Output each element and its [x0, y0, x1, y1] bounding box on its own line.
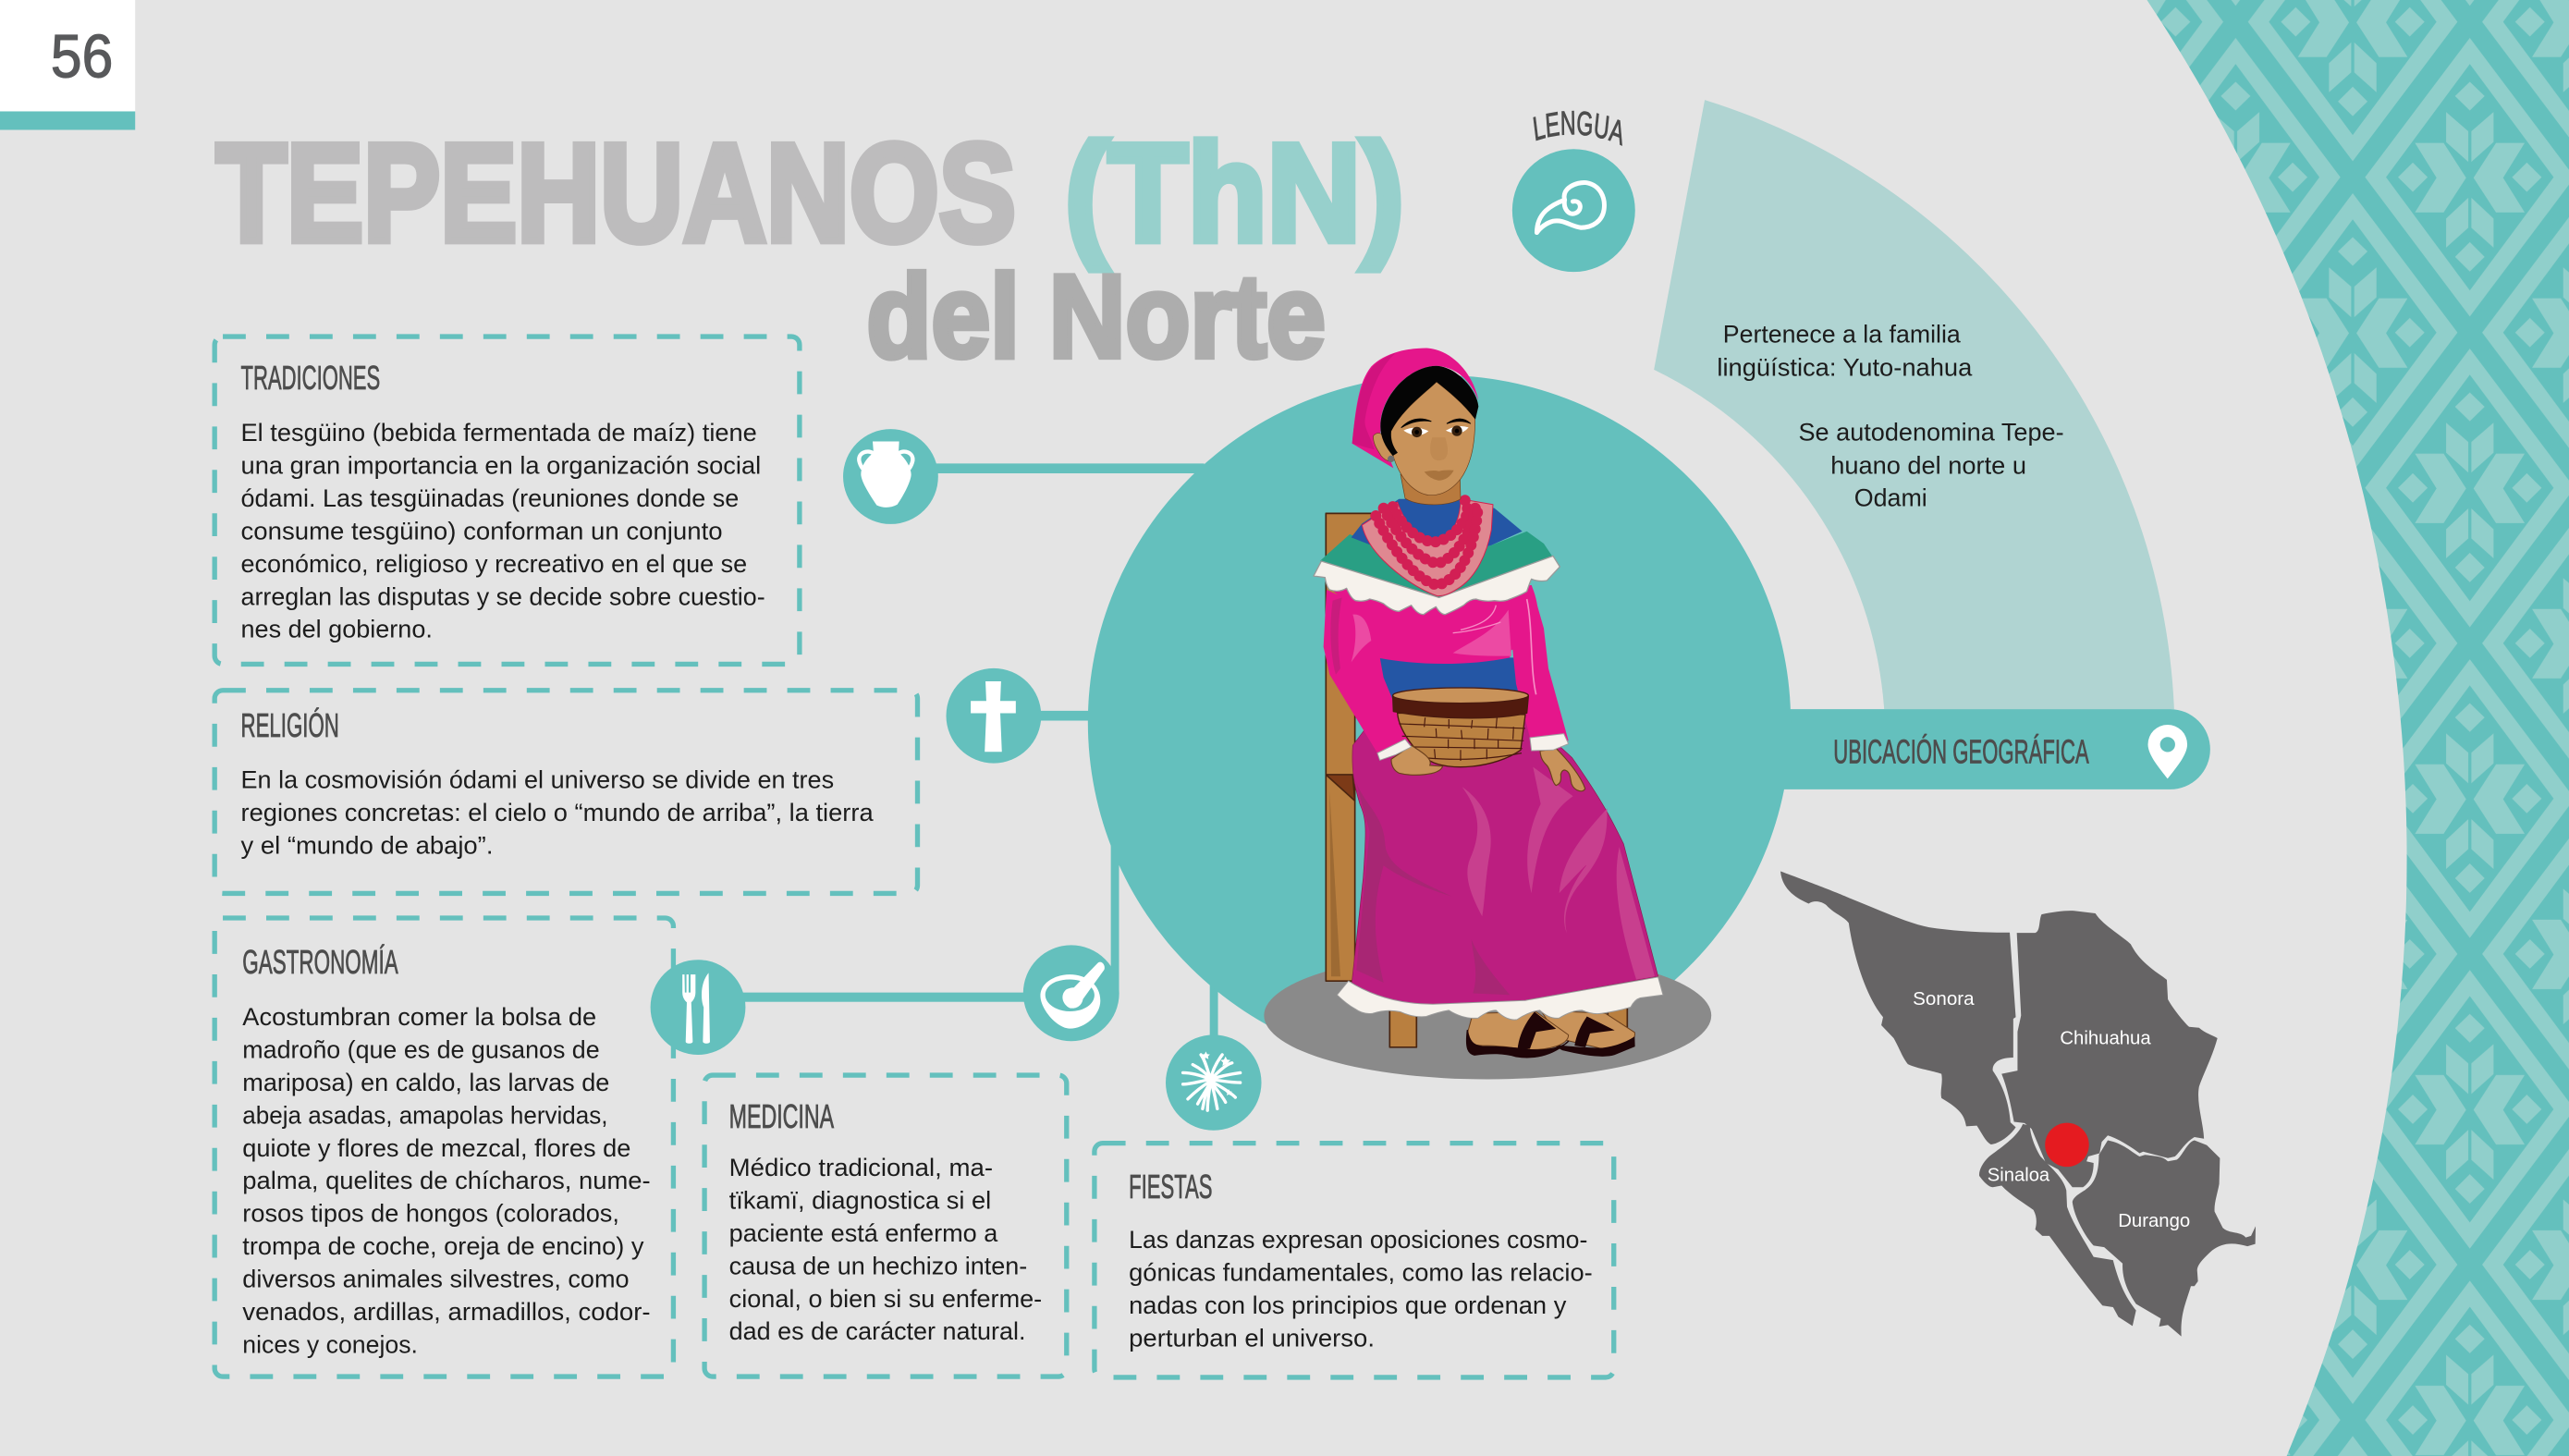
title: TEPEHUANOS — [216, 115, 1016, 270]
panel: gastronomia: mariposa) en caldo, las larvas de — [242, 1069, 609, 1096]
neck — [1401, 474, 1461, 505]
panel: gastronomia: diversos animales silvestres, como — [242, 1266, 630, 1293]
hands — [1391, 745, 1585, 791]
eyes and brows — [1401, 419, 1471, 437]
panel: tradiciones: consume tesgüino) conforman un conjunto — [241, 517, 723, 544]
page number tab — [0, 0, 135, 129]
map labels: Sinaloa — [1988, 1165, 2050, 1185]
bib — [1362, 499, 1493, 596]
blue belt — [1376, 657, 1519, 703]
title: del Norte — [867, 251, 1326, 383]
connector lines — [738, 463, 1218, 1040]
hair — [1380, 366, 1478, 456]
panel: medicina: Médico tradicional, ma- — [729, 1154, 993, 1181]
panel: gastronomia: rosos tipos de hongos (colorados, — [242, 1200, 619, 1228]
shawl — [1320, 532, 1553, 599]
map labels — [1913, 989, 2190, 1231]
panel: medicina: MEDICINA — [729, 1097, 835, 1135]
panel: fiestas: Las danzas expresan oposiciones cosmo- — [1129, 1226, 1587, 1254]
panel: medicina: cional, o bien si su enferme- — [729, 1285, 1042, 1313]
panel: tradiciones: nes del gobierno. — [241, 616, 433, 643]
chair — [1326, 513, 1627, 1047]
basket — [1393, 688, 1528, 767]
language heading curved: LENGUA — [1533, 111, 1622, 146]
panel: gastronomia: abeja asadas, amapolas hervidas, — [242, 1101, 608, 1129]
panel: gastronomia: GASTRONOMÍA — [242, 943, 398, 981]
panel: gastronomia: nices y conejos. — [242, 1330, 418, 1358]
icon: mortar and pestle — [1023, 945, 1119, 1041]
panel: fiestas: gónicas fundamentales, como las relacio- — [1129, 1258, 1593, 1286]
central teal circle — [1088, 375, 1791, 1070]
location bar: UBICACIÓN GEOGRÁFICA — [1833, 733, 2089, 771]
title — [216, 115, 1404, 383]
cuffs — [1377, 734, 1569, 760]
icon: cross — [947, 668, 1041, 764]
icon: fork and knife — [651, 960, 745, 1055]
map labels: Sonora — [1913, 989, 1975, 1009]
text: language: Se autodenomina Tepe- — [1798, 419, 2064, 447]
blouse — [1324, 585, 1569, 753]
panel: medicina: paciente está enfermo a — [729, 1219, 997, 1247]
panel: tradiciones: El tesgüino (bebida fermentada de maíz) tiene — [241, 419, 757, 447]
icon: language — [1512, 149, 1635, 272]
panel: medicina — [704, 1075, 1067, 1376]
map — [1780, 871, 2256, 1337]
panel: religion: regiones concretas: el cielo o “mundo de arriba”, la tierra — [241, 799, 874, 826]
map labels: Durango — [2118, 1211, 2190, 1231]
panel: fiestas: perturban el universo. — [1129, 1324, 1375, 1352]
icon: map pin — [2148, 725, 2187, 778]
panel: gastronomia: Acostumbran comer la bolsa de — [242, 1003, 596, 1031]
panel: tradiciones: arreglan las disputas y se decide sobre cuestio- — [241, 582, 765, 610]
panel: tradiciones — [214, 336, 800, 664]
collar lace — [1314, 556, 1560, 615]
floor shadow — [1264, 951, 1711, 1080]
panel: tradiciones: una gran importancia en la organización social — [241, 452, 761, 480]
text: language: Odami — [1854, 483, 1927, 511]
panel: gastronomia: trompa de coche, oreja de encino) y — [242, 1232, 644, 1260]
face — [1390, 382, 1475, 496]
left foot and sandal — [1467, 1012, 1569, 1058]
panel: tradiciones: ódami. Las tesgüinadas (reuniones donde se — [241, 484, 739, 512]
panel: medicina: tïkamï, diagnostica si el — [729, 1186, 991, 1214]
panel: religion: y el “mundo de abajo”. — [241, 832, 493, 860]
figure: seated woman — [1314, 348, 1663, 1058]
panel: gastronomia: quiote y flores de mezcal, flores de — [242, 1134, 630, 1162]
icon: firework — [1166, 1034, 1262, 1131]
panel: tradiciones: económico, religioso y recreativo en el que se — [241, 550, 747, 578]
blue neckline — [1352, 499, 1523, 560]
panel: gastronomia: palma, quelites de chícharos, nume- — [242, 1167, 651, 1194]
text: language — [1717, 320, 2064, 511]
text: language: lingüística: Yuto-nahua — [1717, 354, 1972, 382]
woven teal pattern band — [2113, 0, 2569, 1456]
skirt — [1352, 701, 1658, 1004]
right foot and sandal — [1541, 1010, 1635, 1057]
text: language: huano del norte u — [1830, 452, 2026, 480]
panel: fiestas: FIESTAS — [1129, 1168, 1213, 1205]
page number tab: 56 — [51, 22, 113, 90]
map labels: Chihuahua — [2060, 1028, 2151, 1048]
panel: medicina: dad es de carácter natural. — [729, 1317, 1025, 1345]
map states — [1780, 871, 2256, 1337]
ear — [1374, 434, 1395, 461]
panel: religion — [214, 691, 918, 893]
icon: jar — [843, 429, 938, 524]
panel: medicina: causa de un hechizo inten- — [729, 1252, 1027, 1279]
text: language: Pertenece a la familia — [1723, 320, 1961, 348]
panel: fiestas: nadas con los principios que ordenan y — [1129, 1291, 1567, 1319]
title: (ThN) — [1065, 115, 1404, 270]
necklace beads — [1376, 496, 1477, 585]
language heading curved — [1533, 111, 1622, 146]
panel: gastronomia: madroño (que es de gusanos de — [242, 1035, 600, 1063]
panel: religion: RELIGIÓN — [241, 706, 339, 744]
earring — [1388, 456, 1394, 462]
panel: gastronomia: venados, ardillas, armadillos, codor- — [242, 1298, 651, 1326]
headscarf — [1352, 348, 1478, 468]
panel: gastronomia — [214, 918, 673, 1376]
panel: religion: En la cosmovisión ódami el universo se divide en tres — [241, 766, 834, 794]
skirt lace hem — [1337, 977, 1663, 1020]
map location marker — [2045, 1123, 2089, 1167]
panel: fiestas — [1095, 1144, 1614, 1377]
location bar — [1737, 709, 2210, 789]
language sector — [1654, 100, 2174, 709]
panel: tradiciones: TRADICIONES — [241, 359, 380, 397]
